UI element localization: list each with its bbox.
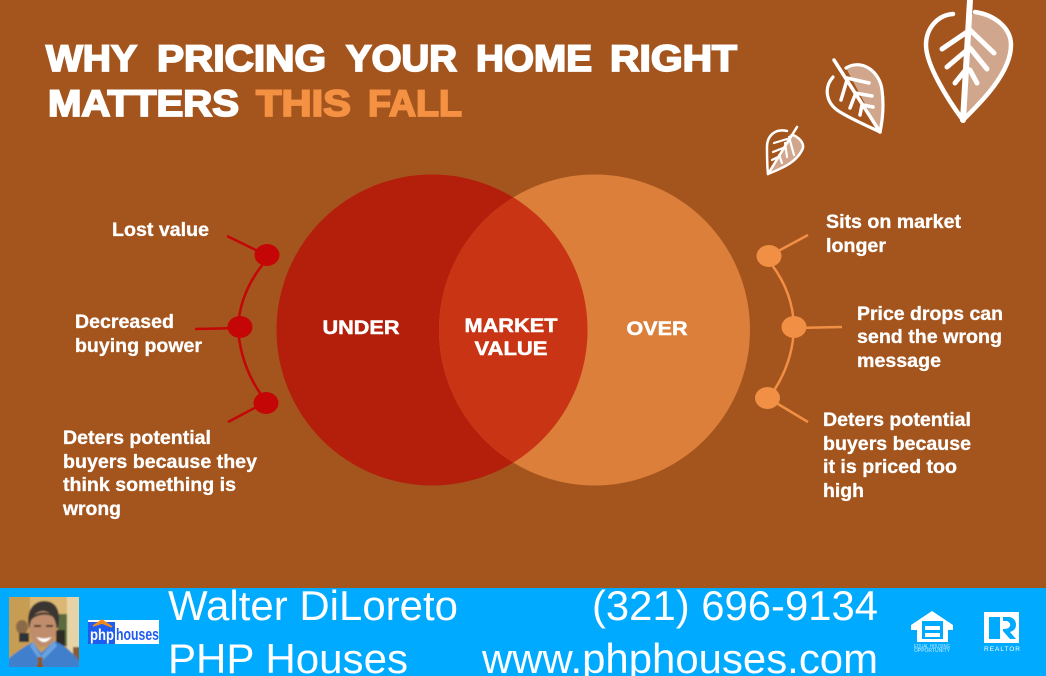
left connector with nodes	[195, 236, 280, 422]
icon: equal housing opportunity	[911, 611, 953, 654]
label: sits on market longer: Sits on market	[826, 212, 962, 233]
circle: over	[439, 174, 750, 486]
right labels	[823, 212, 1003, 502]
icon: medium leaf	[827, 60, 883, 132]
title: FALL	[368, 83, 462, 124]
label: market value: VALUE	[474, 339, 548, 360]
label: price drops: message	[857, 351, 941, 372]
circle overlap: market value	[439, 197, 588, 463]
right connector with nodes	[755, 235, 842, 422]
title: WHY	[46, 38, 137, 79]
label: decreased buying power	[75, 312, 203, 357]
contact: phone: (321) 696-9134	[592, 582, 878, 629]
label: over: OVER	[626, 319, 688, 340]
icon: realtor	[984, 612, 1020, 653]
label: under: UNDER	[322, 318, 400, 339]
title	[46, 38, 737, 124]
title: YOUR	[346, 38, 457, 79]
icon: realtor: REALTOR	[984, 646, 1020, 653]
label: market value	[464, 316, 558, 360]
label: deters potential buyers, under: wrong	[62, 499, 121, 520]
contact: name: Walter DiLoreto	[168, 582, 458, 629]
icon: large leaf	[926, 0, 1011, 120]
label: sits on market longer	[826, 212, 962, 257]
label: deters potential buyers, over	[823, 410, 971, 502]
logo: php houses: php	[90, 627, 114, 644]
venn diagram	[276, 174, 750, 486]
icon: equal housing opportunity: EQUAL HOUSING	[914, 644, 950, 650]
label: decreased buying power: Decreased	[75, 312, 174, 333]
label: price drops: Price drops can	[857, 304, 1003, 325]
label: deters potential buyers, under	[62, 428, 257, 520]
logo: php houses: houses	[116, 625, 159, 644]
label: price drops: send the wrong	[857, 327, 1002, 348]
title: RIGHT	[610, 38, 737, 79]
label: lost value: Lost value	[112, 220, 209, 241]
circle: under	[276, 174, 588, 486]
title: HOME	[476, 38, 592, 79]
title: THIS	[256, 83, 351, 124]
label: deters potential buyers, over: buyers because	[823, 434, 971, 455]
label: deters potential buyers, over: high	[823, 481, 864, 502]
label: decreased buying power: buying power	[75, 336, 203, 357]
icon: small leaf	[767, 127, 803, 174]
title: MATTERS	[48, 83, 239, 124]
label: market value: MARKET	[464, 316, 558, 337]
label: sits on market longer: longer	[826, 236, 887, 257]
label: deters potential buyers, over: it is priced too	[823, 457, 957, 478]
title: PRICING	[157, 38, 326, 79]
label: deters potential buyers, under: Deters potential	[63, 428, 211, 449]
photo: agent portrait	[9, 597, 79, 667]
icon: equal housing opportunity: OPPORTUNITY	[914, 648, 951, 654]
label: deters potential buyers, over: Deters potential	[823, 410, 971, 431]
logo: php houses	[88, 620, 159, 644]
label: deters potential buyers, under: think something is	[63, 475, 236, 496]
left labels	[62, 220, 257, 520]
footer bar	[0, 582, 1046, 676]
label: price drops	[857, 304, 1003, 372]
label: deters potential buyers, under: buyers because they	[63, 452, 257, 473]
